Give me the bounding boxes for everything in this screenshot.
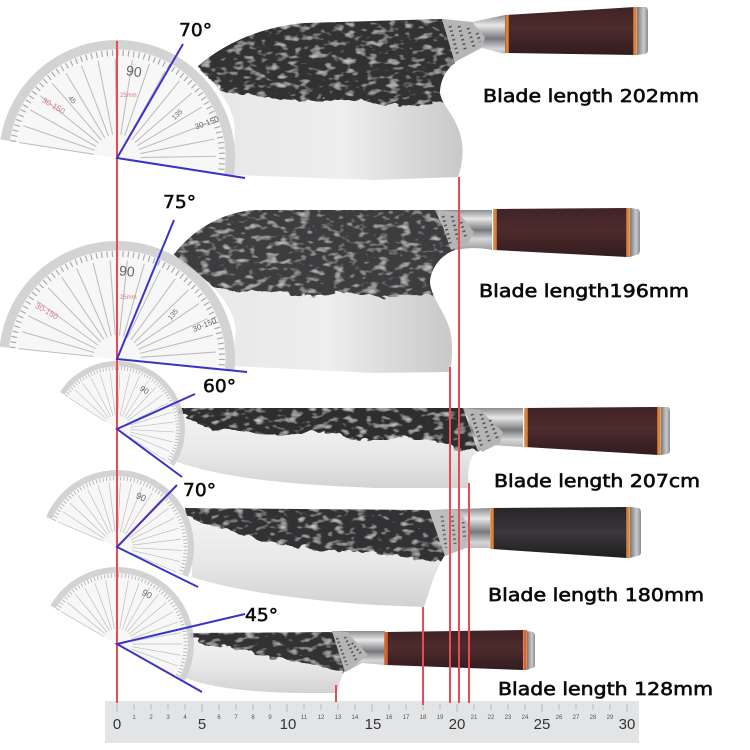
- ruler numbers: 27: [573, 715, 580, 721]
- orange rings 4: [492, 507, 628, 558]
- blade 4: [185, 508, 445, 607]
- etched dots 4: [442, 516, 465, 548]
- protractor 1 numbers: 30-150: [41, 96, 67, 116]
- blade length label 5: Blade length 128mm: [498, 679, 713, 700]
- protractor 2 numbers: 25mm: [120, 295, 137, 301]
- blade length label 1: Blade length 202mm: [483, 86, 699, 107]
- ruler numbers: [113, 715, 635, 733]
- blade length label 2: Blade length196mm: [479, 281, 689, 302]
- ruler: [105, 701, 639, 743]
- protractor 1 numbers: 30-150: [194, 114, 221, 131]
- ruler numbers: 25: [534, 716, 550, 733]
- protractor 3 number: 90: [138, 384, 151, 397]
- blue angle lines: [117, 44, 247, 692]
- ruler numbers: 0: [113, 716, 121, 733]
- bolster 3: [463, 408, 523, 452]
- end cap 3: [661, 407, 670, 455]
- orange rings 1: [507, 7, 635, 55]
- ruler numbers: 13: [335, 715, 342, 721]
- protractor 5 number: 90: [140, 587, 154, 601]
- ruler numbers: 1: [132, 715, 136, 721]
- ruler numbers: 5: [198, 716, 206, 733]
- ruler numbers: 16: [386, 715, 393, 721]
- bolster 4: [429, 508, 490, 556]
- orange rings 3: [526, 407, 659, 455]
- blade 3: [177, 408, 478, 488]
- blade 5: [186, 632, 344, 693]
- protractor 5: [50, 539, 222, 682]
- protractor 2 numbers: 135: [167, 308, 180, 322]
- angle label 45: 45°: [245, 605, 278, 626]
- ruler numbers: 29: [607, 715, 614, 721]
- etched pattern 5: [332, 631, 368, 672]
- ruler numbers: 3: [166, 715, 170, 721]
- protractor 1 numbers: [41, 62, 221, 131]
- protractor 4: [46, 446, 218, 577]
- ruler numbers: 7: [234, 715, 238, 721]
- protractor 2 numbers: 30-150: [34, 301, 60, 322]
- end cap 1: [637, 7, 648, 55]
- bolster 5: [332, 631, 385, 672]
- ruler numbers: 21: [471, 715, 478, 721]
- red measuring lines: [117, 41, 469, 705]
- ruler numbers: 17: [403, 715, 410, 721]
- handle 2: [494, 208, 627, 257]
- handle 3: [525, 407, 658, 455]
- knife 2: [165, 205, 640, 377]
- ruler numbers: 30: [619, 716, 635, 733]
- ruler numbers: 14: [352, 715, 359, 721]
- protractor 1 numbers: 90: [125, 62, 143, 80]
- protractor 2 numbers: [34, 262, 218, 334]
- end cap 2: [630, 208, 640, 257]
- ruler numbers: 28: [590, 715, 597, 721]
- ruler numbers: 12: [318, 715, 325, 721]
- bolster 1: [442, 15, 505, 62]
- knife 1: [190, 7, 648, 185]
- blade length label 3: Blade length 207cm: [494, 471, 700, 492]
- knife 4: [180, 504, 641, 610]
- ruler numbers: 26: [556, 715, 563, 721]
- ruler numbers: 6: [217, 715, 221, 721]
- protractor 1 numbers: 25mm: [120, 93, 137, 99]
- protractor 2: [0, 229, 247, 371]
- blade length label 4: Blade length 180mm: [488, 585, 704, 606]
- etched dots 1: [450, 26, 480, 56]
- etched pattern 3: [464, 408, 503, 452]
- angle label 60: 60°: [203, 376, 236, 397]
- angle label 75: 75°: [163, 192, 196, 213]
- etched dots 3: [472, 414, 498, 447]
- blade 1: [197, 19, 462, 180]
- orange rings 5: [386, 630, 525, 670]
- ruler numbers: 15: [365, 716, 381, 733]
- ruler numbers: 2: [149, 715, 153, 721]
- protractor 1: [0, 23, 252, 176]
- bolster 2: [435, 210, 492, 250]
- end cap 5: [527, 631, 535, 670]
- protractor 1 numbers: 45: [66, 95, 77, 106]
- knife 5: [180, 628, 535, 696]
- etched pattern 2: [437, 210, 474, 250]
- protractor 1 numbers: 135: [171, 108, 184, 122]
- protractor 2 numbers: 30-150: [191, 316, 218, 334]
- etched dots 2: [443, 216, 466, 246]
- ruler numbers: 10: [280, 716, 296, 733]
- etched pattern 4: [429, 510, 470, 556]
- ruler numbers: 18: [420, 715, 427, 721]
- handle 1: [505, 7, 635, 55]
- ruler numbers: 9: [268, 715, 272, 721]
- end cap 4: [630, 507, 641, 558]
- ruler ticks: [117, 704, 627, 712]
- handle 4: [492, 507, 627, 558]
- ruler numbers: 8: [251, 715, 255, 721]
- orange rings 2: [495, 208, 628, 257]
- knife 3: [177, 407, 670, 488]
- etched dots 5: [337, 637, 362, 665]
- ruler numbers: 20: [449, 716, 465, 733]
- etched pattern 1: [442, 19, 485, 62]
- protractor 4 number: 90: [134, 490, 148, 504]
- angle label 70: 70°: [179, 20, 212, 41]
- handle 5: [386, 630, 523, 670]
- angle label 70 lower: 70°: [183, 480, 216, 501]
- ruler numbers: 23: [505, 715, 512, 721]
- ruler numbers: 4: [183, 715, 187, 721]
- blade 2: [165, 205, 460, 377]
- protractor 3: [60, 335, 211, 466]
- ruler numbers: 24: [522, 715, 529, 721]
- ruler numbers: 19: [437, 715, 444, 721]
- protractor 2 numbers: 90: [118, 262, 136, 280]
- ruler numbers: 11: [301, 715, 308, 721]
- ruler numbers: 22: [488, 715, 495, 721]
